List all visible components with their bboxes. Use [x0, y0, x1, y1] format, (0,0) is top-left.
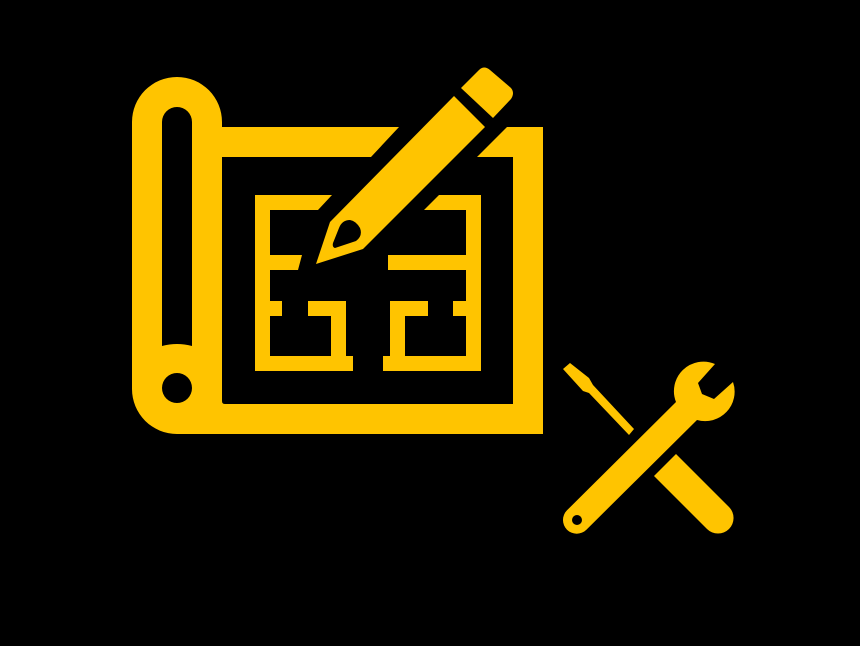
screwdriver blade and shaft	[563, 363, 634, 435]
wrench	[563, 362, 735, 534]
icon: crossed screwdriver and wrench	[563, 362, 735, 534]
pencil eraser	[461, 68, 513, 118]
screwdriver handle	[654, 454, 734, 534]
floor plan: right room walls	[383, 195, 481, 371]
pencil body and tip	[316, 96, 485, 264]
floor plan drawing	[255, 195, 481, 371]
scroll roll and sheet frame	[132, 77, 543, 434]
floor plan: left room walls	[255, 195, 353, 371]
icon: blueprint scroll sheet	[132, 77, 543, 434]
icon: pencil	[316, 68, 513, 264]
